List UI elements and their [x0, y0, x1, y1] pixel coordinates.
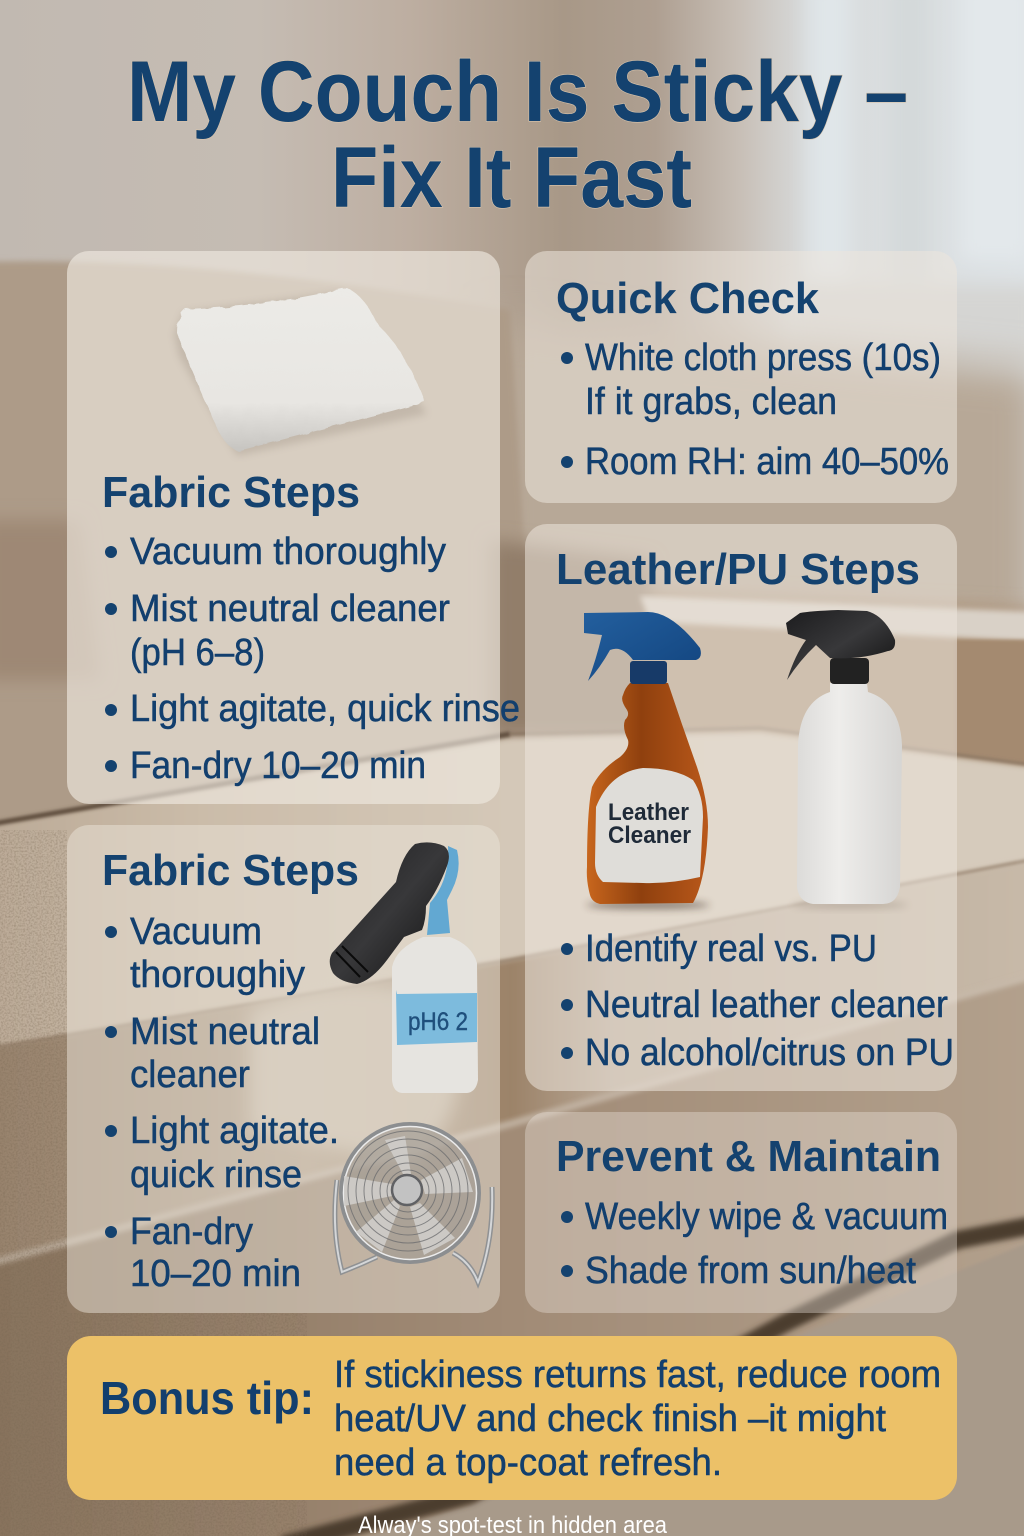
list: second fabric bullets: Fan-dry: [130, 1211, 253, 1253]
list: second fabric bullets: cleaner: [130, 1054, 250, 1096]
title: My Couch Is Sticky –: [127, 44, 908, 140]
heading: leather/PU steps: Leather/PU Steps: [556, 545, 920, 594]
label text: pH: pH6 2: [408, 1008, 468, 1036]
heading: fabric steps second: Fabric Steps: [102, 846, 359, 895]
list: second fabric bullets: 10–20 min: [130, 1253, 301, 1295]
panel: fabric steps with cloth: [67, 251, 520, 804]
heading: prevent and maintain: Prevent & Maintain: [556, 1132, 941, 1181]
list: leather bullets: Neutral leather cleaner: [585, 984, 948, 1026]
panel: leather and PU steps: [525, 524, 957, 1091]
callout: bonus tip: [67, 1336, 957, 1500]
icon: white cloth: [174, 288, 427, 456]
heading: quick check: Quick Check: [556, 274, 820, 323]
label text: leather cleaner: [608, 799, 691, 849]
list: quick check bullets: [561, 337, 949, 483]
list: leather bullets: [561, 928, 954, 1074]
list: fabric step bullets: [105, 531, 520, 787]
list: fabric step bullets: Vacuum thoroughly: [130, 531, 446, 573]
list: prevent bullets: [561, 1196, 948, 1292]
panel: fabric steps with sprayer and fan: [67, 825, 500, 1313]
bonus tip text: If stickiness returns fast, reduce room: [334, 1354, 941, 1396]
list: fabric step bullets: Light agitate, quick rinse: [130, 688, 520, 730]
title: Fix It Fast: [331, 130, 692, 226]
list: quick check bullets: White cloth press (10s): [585, 337, 941, 379]
list: leather bullets: No alcohol/citrus on PU: [585, 1032, 954, 1074]
icon: white spray bottle: [786, 610, 908, 908]
icon: amber leather cleaner spray bottle: [584, 612, 710, 909]
bonus tip text: heat/UV and check finish –it might: [334, 1398, 886, 1440]
heading: fabric steps: Fabric Steps: [102, 468, 360, 517]
icon: metal desk fan: [335, 1124, 492, 1282]
list: second fabric bullets: [105, 911, 339, 1295]
label text: leather cleaner: Cleaner: [608, 822, 691, 849]
list: leather bullets: Identify real vs. PU: [585, 928, 877, 970]
panel: prevent and maintain: [525, 1112, 957, 1313]
bonus tip text: need a top-coat refresh.: [334, 1442, 722, 1484]
title: [127, 44, 908, 226]
list: second fabric bullets: quick rinse: [130, 1154, 302, 1196]
list: quick check bullets: Room RH: aim 40–50%: [585, 441, 949, 483]
list: quick check bullets: If it grabs, clean: [585, 381, 837, 423]
list: fabric step bullets: Mist neutral cleaner: [130, 588, 450, 630]
panel: quick check: [525, 251, 957, 503]
bonus tip label: Bonus tip:: [100, 1372, 314, 1424]
list: prevent bullets: Weekly wipe & vacuum: [585, 1196, 948, 1238]
label text: leather cleaner: Leather: [608, 799, 689, 826]
list: prevent bullets: Shade from sun/heat: [585, 1250, 916, 1292]
list: second fabric bullets: Vacuum: [130, 911, 262, 953]
list: fabric step bullets: (pH 6–8): [130, 632, 265, 674]
bonus tip text: [334, 1354, 941, 1484]
list: second fabric bullets: thoroughiy: [130, 954, 305, 996]
list: second fabric bullets: Mist neutral: [130, 1011, 320, 1053]
list: fabric step bullets: Fan-dry 10–20 min: [130, 745, 426, 787]
icon: pH spray bottle: [330, 842, 478, 1093]
list: second fabric bullets: Light agitate.: [130, 1110, 339, 1152]
